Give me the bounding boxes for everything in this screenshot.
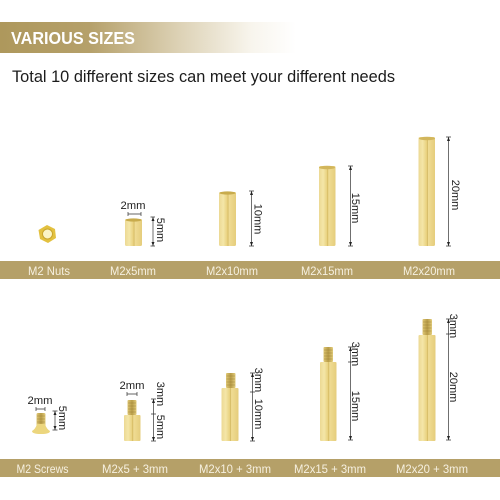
label: M2 Screws: M2 Screws xyxy=(16,464,69,476)
icon: M2 screw xyxy=(28,395,68,434)
dimension: 5mm height: 5mm xyxy=(56,406,68,430)
dimension: 3mm + 15mm height: 3mm xyxy=(349,342,361,366)
label bar: top row xyxy=(0,261,500,279)
label: M2x5 + 3mm: M2x5 + 3mm xyxy=(102,464,168,476)
spacer: M2x20mm xyxy=(418,137,461,246)
dimension: 2mm width: 2mm xyxy=(28,395,52,407)
label: M2x20mm: M2x20mm xyxy=(403,266,455,278)
dimension: 3mm + 20mm height xyxy=(446,314,459,440)
standoff: M2x20 + 3mm xyxy=(418,314,459,441)
spacer: M2x10mm xyxy=(219,191,264,246)
dimension: 3mm + 15mm height: 15mm xyxy=(349,391,361,421)
dimension: 3mm + 20mm height: 3mm xyxy=(447,314,459,338)
icon: M2 nut xyxy=(38,225,56,243)
label: M2x5mm: M2x5mm xyxy=(110,266,156,278)
label: M2x10 + 3mm: M2x10 + 3mm xyxy=(199,464,271,476)
label: M2x20 + 3mm: M2x20 + 3mm xyxy=(396,464,468,476)
dimension: 20mm height: 20mm xyxy=(449,180,461,210)
dimension: 3mm + 5mm height: 5mm xyxy=(154,415,166,439)
dimension: 3mm + 5mm height xyxy=(151,382,166,441)
label: M2x10mm: M2x10mm xyxy=(206,266,258,278)
standoff: M2x5 + 3mm xyxy=(120,380,166,441)
header band xyxy=(0,22,296,53)
dimension: 5mm height: 5mm xyxy=(154,218,166,242)
dimension: 10mm height: 10mm xyxy=(252,204,264,234)
heading: various sizes: VARIOUS SIZES xyxy=(11,28,135,48)
dimension: 2mm width: 2mm xyxy=(120,200,146,212)
standoff: M2x15 + 3mm xyxy=(320,342,361,441)
label: M2 Nuts: M2 Nuts xyxy=(28,266,70,278)
dimension: 2mm width: 2mm xyxy=(120,380,144,392)
standoff: M2x10 + 3mm xyxy=(222,368,264,441)
dimension: 3mm + 10mm height: 10mm xyxy=(252,399,264,429)
spacer: M2x15mm xyxy=(319,166,361,246)
label: M2x15 + 3mm: M2x15 + 3mm xyxy=(294,464,366,476)
dimension: 3mm + 5mm height: 3mm xyxy=(154,382,166,406)
label: M2x15mm: M2x15mm xyxy=(301,266,353,278)
spacer: M2x5mm xyxy=(120,200,166,246)
dimension: 3mm + 10mm height xyxy=(250,368,264,441)
dimension: 3mm + 20mm height: 20mm xyxy=(447,372,459,402)
dimension: 3mm + 10mm height: 3mm xyxy=(252,368,264,392)
dimension: 3mm + 15mm height xyxy=(348,342,361,440)
subtitle text: Total 10 different sizes can meet your different needs xyxy=(12,67,395,86)
label bar: bottom row xyxy=(0,459,500,477)
dimension: 15mm height: 15mm xyxy=(349,193,361,223)
